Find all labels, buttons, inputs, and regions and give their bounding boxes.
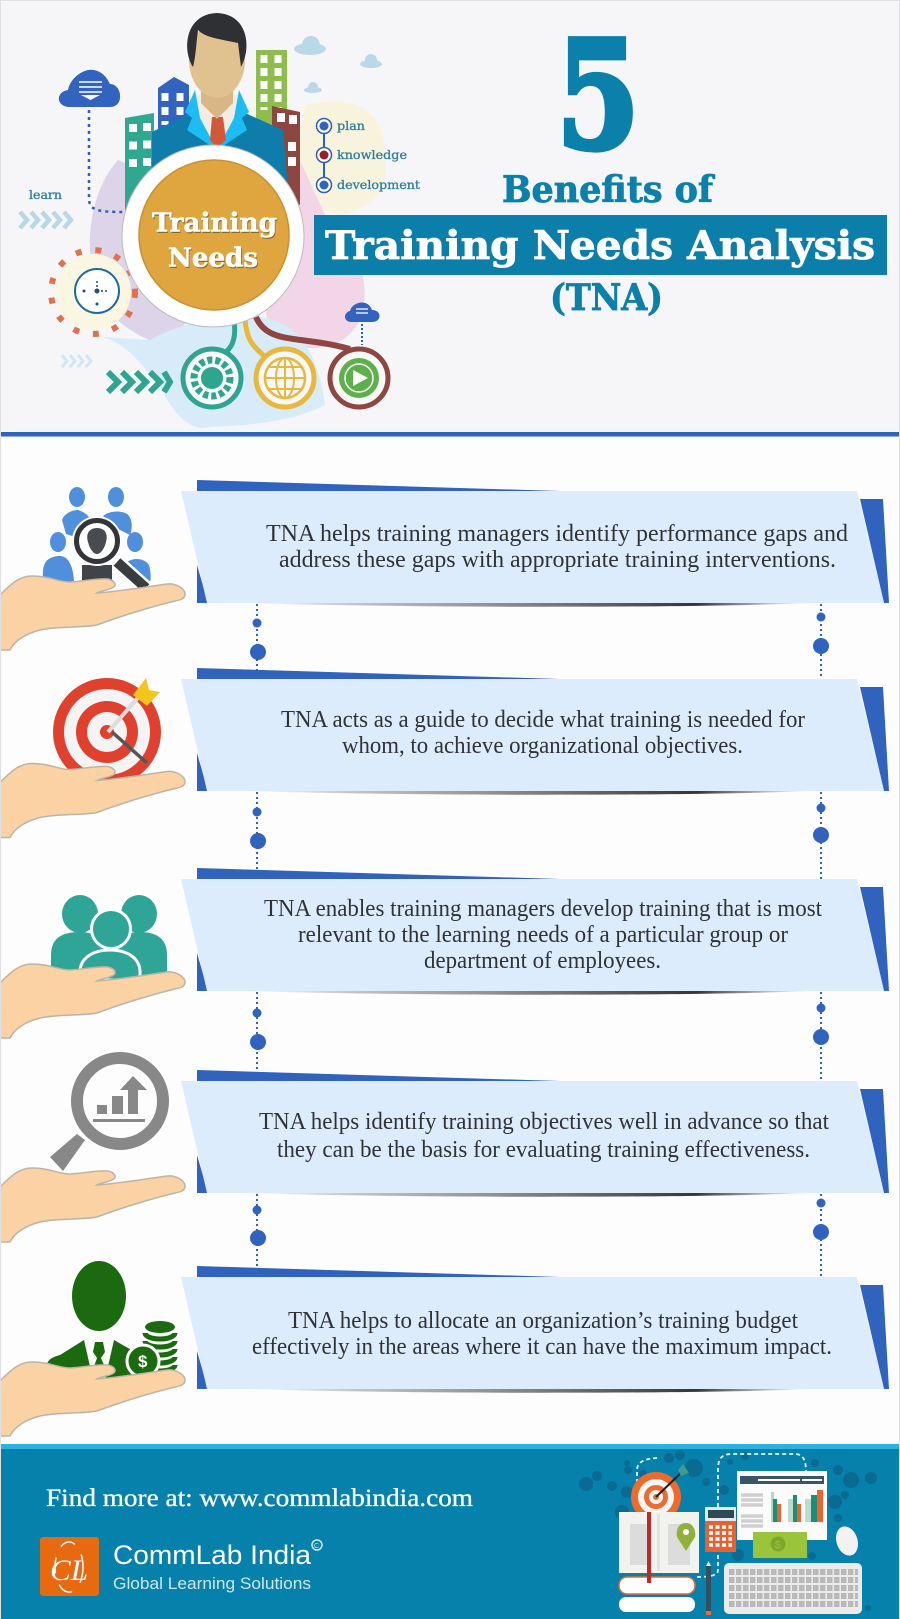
mouse [832,1523,862,1559]
training needs text: Training [152,208,277,238]
world map dots [579,1450,877,1611]
panel: benefit 1: address these gaps with appropriate training interventions. [279,547,836,573]
panel: benefit 5: TNA helps to allocate an organization’s training budget [288,1308,798,1334]
icon: team of three [51,895,167,980]
panel: benefit 3: relevant to the learning needs of a particular group or [298,922,788,948]
hand 2 [0,764,185,838]
list: plan knowledge development: plan [337,119,365,133]
panel: header background [1,1,899,432]
icon: target with dart [53,678,161,786]
icon: businessman with coins [46,1261,175,1384]
panel: benefit 4: they can be the basis for evaluating training effectiveness. [277,1137,810,1163]
panel: benefit 3: department of employees. [424,948,661,974]
icon: people under magnifier [43,487,151,588]
footer: website line: Find more at: www.commlabindia.com [46,1485,474,1512]
icon: play button [330,349,388,407]
footer: brand name: CommLab India [113,1540,312,1570]
keyboard [724,1563,862,1614]
training needs text shadow [153,210,278,275]
training needs text shadow: Needs [169,245,259,275]
footer: logo mark: CL [50,1554,88,1587]
footer: tagline: Global Learning Solutions [113,1574,311,1593]
panel: benefit 2: whom, to achieve organizational objectives. [342,733,743,759]
banknote: $ [775,1540,781,1551]
icon: clock with dotted ring [51,250,135,334]
panel: benefit 4 [181,1070,889,1197]
list: plan knowledge development: knowledge [337,148,407,162]
icon: magnifier with growth chart [50,1058,163,1171]
target [631,1464,689,1522]
panel: benefit 5 [181,1266,889,1393]
panel: benefit 3 [181,868,889,995]
list: plan knowledge development [316,118,420,192]
blue cloud with dotted connector [59,70,125,212]
header divider [1,432,899,436]
chevrons: teal [108,372,170,392]
calculator [705,1507,736,1552]
buildings [125,50,300,210]
icon: businessman with coins: $ [138,1352,148,1371]
cloud: decorative light clouds [294,36,382,93]
training needs text shadow: Training [153,210,278,240]
hand 4 [0,1168,185,1242]
panel: benefit 4: TNA helps identify training objectives well in advance so that [259,1109,829,1135]
title banner: Training Needs Analysis [325,223,875,269]
footer: copyright mark [312,1540,322,1550]
illustration: training needs [20,13,420,428]
panel: benefit 1: TNA helps training managers identify performance gaps and [266,521,848,547]
connectors between panels [250,604,829,1277]
hand 1 [0,576,185,650]
title: Benefits of: Benefits of [502,169,715,211]
pen [706,1561,711,1615]
chevrons: faint [62,355,91,367]
hand 5 [0,1362,185,1436]
panel: benefit 2: TNA acts as a guide to decide what training is needed for [281,707,805,733]
hand 3 [0,964,185,1038]
banknote [753,1532,807,1558]
dotted white paths [637,1454,806,1577]
panel: benefit 5: effectively in the areas where it can have the maximum impact. [252,1334,832,1360]
title: 5: 5 [556,8,640,184]
footer: copyright mark: C [314,1543,319,1550]
label: learn: learn [29,188,62,202]
background colour blobs [55,101,386,428]
panel: footer [1,1444,899,1619]
man figure [152,13,288,190]
book [619,1512,699,1612]
panel: benefit 3: TNA enables training managers develop training that is most [264,896,822,922]
training needs text: Needs [168,244,258,274]
training needs circle [122,145,304,327]
panel: benefit 1 [181,480,889,607]
footer illustration [579,1450,877,1615]
panel: benefit 2 [181,668,889,795]
footer: logo mark [40,1537,99,1596]
icon: gear [183,349,241,407]
small cloud and dotted link [345,303,380,345]
list: plan knowledge development: development [337,178,420,192]
training needs text [152,208,277,274]
icon: globe [256,349,314,407]
connectors to bottom icons [226,317,350,356]
chevrons: light [20,212,71,228]
browser window chart [737,1471,827,1540]
title: (TNA): (TNA) [550,277,663,319]
